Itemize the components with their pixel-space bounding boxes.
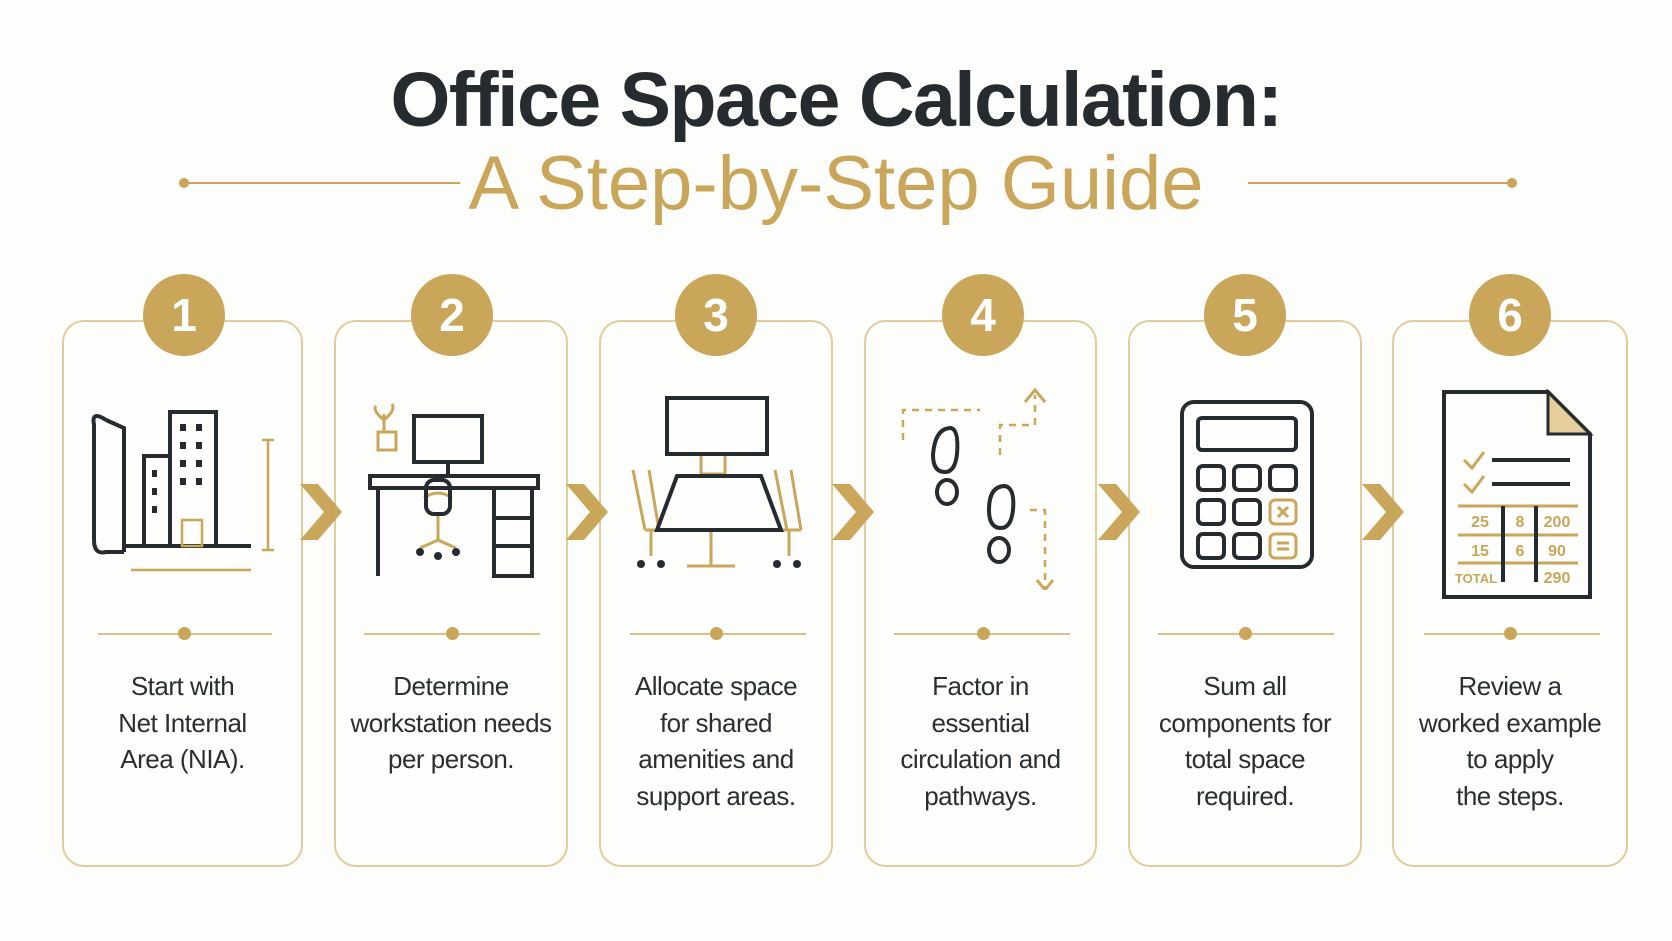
number badge 1 [143, 274, 225, 356]
number badge 1: 1 [171, 289, 197, 341]
text: step 5: Sum all [1203, 671, 1287, 701]
icon: report document: 200 [1544, 514, 1570, 531]
text: step 6: worked example [1419, 708, 1601, 738]
text: step 5 [1159, 671, 1332, 810]
text: step 1: Start with [131, 671, 234, 701]
text: step 3: amenities and [638, 744, 794, 774]
icon: desk workstation [368, 403, 540, 578]
text: step 3: for shared [660, 708, 772, 738]
text: step 1: Area (NIA). [120, 744, 245, 774]
text: step 2: per person. [388, 744, 514, 774]
chevron arrows [300, 484, 1404, 540]
icon: report document: 290 [1544, 570, 1570, 587]
text: step 6 [1418, 671, 1601, 810]
text: step 5: components for [1159, 708, 1331, 738]
text: step 4: circulation and [900, 744, 1061, 774]
text: step 1: Net Internal [118, 708, 247, 738]
text: step 5: total space [1185, 744, 1305, 774]
text: step 1 [118, 671, 247, 774]
text: step 4: pathways. [924, 780, 1037, 810]
icon: report document: TOTAL [1455, 571, 1497, 586]
number badge 5 [1204, 274, 1286, 356]
number badge 4 [942, 274, 1024, 356]
card 1 [62, 320, 303, 867]
text: step 6: Review a [1459, 671, 1561, 701]
text: step 2 [350, 671, 552, 774]
number badge 2: 2 [439, 289, 465, 341]
card 6 [1392, 320, 1628, 867]
card 3 [599, 320, 833, 867]
text: step 3: support areas. [636, 780, 796, 810]
text: step 4: Factor in [932, 671, 1029, 701]
number badge 4: 4 [970, 289, 996, 341]
card 5 [1128, 320, 1362, 867]
number badge 5: 5 [1232, 289, 1258, 341]
dividers [98, 633, 272, 635]
text: step 3 [635, 671, 797, 810]
icon: report document: 15 [1471, 543, 1489, 560]
icon: report document: 8 [1516, 514, 1525, 531]
card 4 [864, 320, 1097, 867]
number badge 3: 3 [703, 289, 729, 341]
text: step 5: required. [1196, 780, 1294, 810]
icon: report document [1442, 388, 1594, 599]
subtitle: A Step-by-Step Guide [468, 141, 1204, 226]
number badge 6 [1469, 274, 1551, 356]
text: step 3: Allocate space [635, 671, 797, 701]
text: step 4: essential [931, 708, 1030, 738]
icon: building with blueprint [92, 410, 274, 572]
number badge 2 [411, 274, 493, 356]
icon: footsteps with paths [902, 388, 1054, 590]
text: step 2: Determine [393, 671, 509, 701]
text: step 4 [900, 671, 1061, 810]
subtitle rules [179, 178, 1517, 188]
icon: report document: 6 [1516, 543, 1525, 560]
icon: report document: 90 [1548, 543, 1566, 560]
number badge 3 [675, 274, 757, 356]
text: step 6: the steps. [1456, 780, 1564, 810]
number badge 6: 6 [1497, 289, 1523, 341]
icon: meeting table [632, 396, 802, 568]
icon: report document: 25 [1471, 514, 1489, 531]
text: step 6: to apply [1466, 744, 1554, 774]
card 2 [334, 320, 568, 867]
icon: calculator [1180, 400, 1314, 569]
title: Office Space Calculation: [390, 57, 1282, 143]
text: step 2: workstation needs [350, 708, 552, 738]
